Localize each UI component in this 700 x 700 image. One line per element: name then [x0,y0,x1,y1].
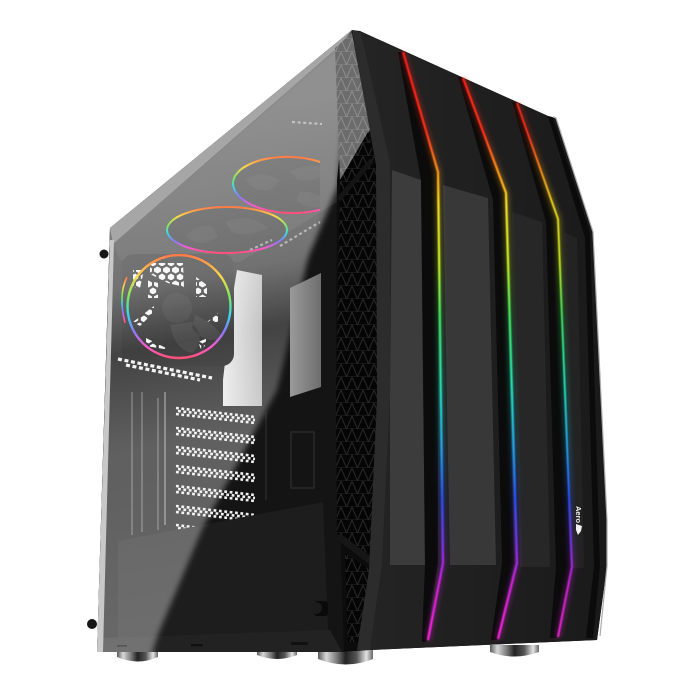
main mesh [336,132,378,555]
top fans [168,158,320,252]
glass reflection [90,20,352,660]
logo [574,506,583,535]
light rear panel [223,270,262,406]
strip glow [403,52,572,640]
logo: Aero [574,506,583,524]
motherboard tray details [266,412,314,500]
top fan RGB rings [166,156,320,254]
bottom trim [96,630,342,652]
dark channels [398,52,600,642]
top chamber back wall [226,143,339,260]
strip line 1 [403,52,443,640]
upper reflected mesh [335,33,370,180]
bottom trim slots [117,642,308,647]
left front edge strip [352,30,390,650]
feet [117,645,539,664]
RGB light strips [403,52,572,640]
front panel base [361,32,607,650]
diagonal mesh bars [338,160,372,200]
vertical rails [132,392,165,535]
rear fan [122,253,234,366]
strip line 3 [517,103,572,637]
front panel [352,30,607,650]
textured panels [390,170,584,568]
PSU shroud [160,502,328,636]
left glass edge [97,240,114,652]
illustration: RGB tempered glass PC case [87,30,608,664]
right edge highlight [553,117,607,636]
glass side panel with interior [90,20,352,660]
PCI slot covers [176,408,255,530]
case silhouette [97,30,607,652]
perforated strip under rear fan [118,359,212,380]
right light panel [290,273,321,397]
strip line 2 [463,78,517,639]
lower mesh [345,553,370,642]
perforated top strip [250,122,322,250]
rear fan RGB ring [122,255,230,358]
top glass band [110,30,352,244]
thumb screws [87,250,328,629]
interior background [97,30,352,652]
ventilation mesh [335,33,378,642]
